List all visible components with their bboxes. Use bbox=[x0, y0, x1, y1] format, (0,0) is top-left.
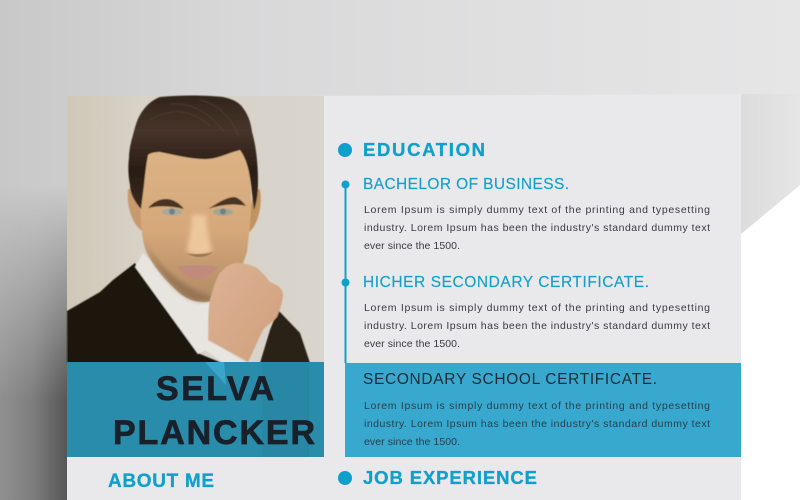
resume sheet bbox=[67, 94, 741, 500]
name band bbox=[67, 362, 324, 457]
icon: lips bbox=[177, 266, 218, 279]
name: Plancker: PLANCKER bbox=[113, 414, 315, 452]
icon: eyes bbox=[162, 208, 233, 216]
icon: hair bbox=[128, 96, 258, 210]
icon: suit jacket bbox=[67, 263, 310, 363]
icon: eyebrows bbox=[148, 197, 246, 209]
name: Selva: SELVA bbox=[156, 370, 274, 408]
highlighted education band bbox=[345, 363, 741, 457]
entry: secondary school certificate: industry. Lorem Ipsum has been the industry's standard dummy text bbox=[364, 418, 710, 430]
entry: higher secondary certificate: Lorem Ipsum is simply dummy text of the printing and typesetting bbox=[364, 302, 710, 314]
job experience dot bbox=[338, 471, 352, 485]
heading: about me: ABOUT ME bbox=[108, 471, 214, 492]
timeline bbox=[338, 143, 352, 363]
hair highlights bbox=[150, 100, 238, 136]
icon: shirt bbox=[135, 253, 246, 363]
entry: secondary school certificate bbox=[363, 371, 710, 448]
entry: bachelor of business: BACHELOR OF BUSINESS. bbox=[363, 176, 569, 193]
icon: hand bbox=[208, 263, 283, 362]
entry: bachelor of business: industry. Lorem Ipsum has been the industry's standard dummy text bbox=[364, 222, 710, 234]
nose shadow bbox=[186, 252, 213, 257]
portrait photo bbox=[67, 96, 324, 363]
heading: education: EDUCATION bbox=[363, 139, 485, 160]
entry: secondary school certificate: SECONDARY SCHOOL CERTIFICATE. bbox=[363, 371, 657, 388]
icon: nose bbox=[187, 215, 212, 255]
entry: bachelor of business: ever since the 1500. bbox=[364, 240, 460, 252]
entry: higher secondary certificate: ever since the 1500. bbox=[364, 338, 460, 350]
entry: bachelor of business: Lorem Ipsum is simply dummy text of the printing and typesetting bbox=[364, 204, 710, 216]
entry: higher secondary certificate: industry. Lorem Ipsum has been the industry's standard dummy text bbox=[364, 320, 710, 332]
icon: ears bbox=[128, 189, 261, 232]
entry: higher secondary certificate: HICHER SECONDARY CERTIFICATE. bbox=[363, 274, 649, 291]
heading: job experience: JOB EXPERIENCE bbox=[363, 467, 537, 488]
entry: bachelor of business bbox=[363, 176, 710, 252]
icon: face bbox=[141, 141, 251, 302]
entry: higher secondary certificate bbox=[363, 274, 710, 350]
entry: secondary school certificate: Lorem Ipsum is simply dummy text of the printing and typesetting bbox=[364, 400, 710, 412]
entry: secondary school certificate: ever since the 1500. bbox=[364, 436, 460, 448]
icon: stubble bbox=[145, 242, 214, 301]
